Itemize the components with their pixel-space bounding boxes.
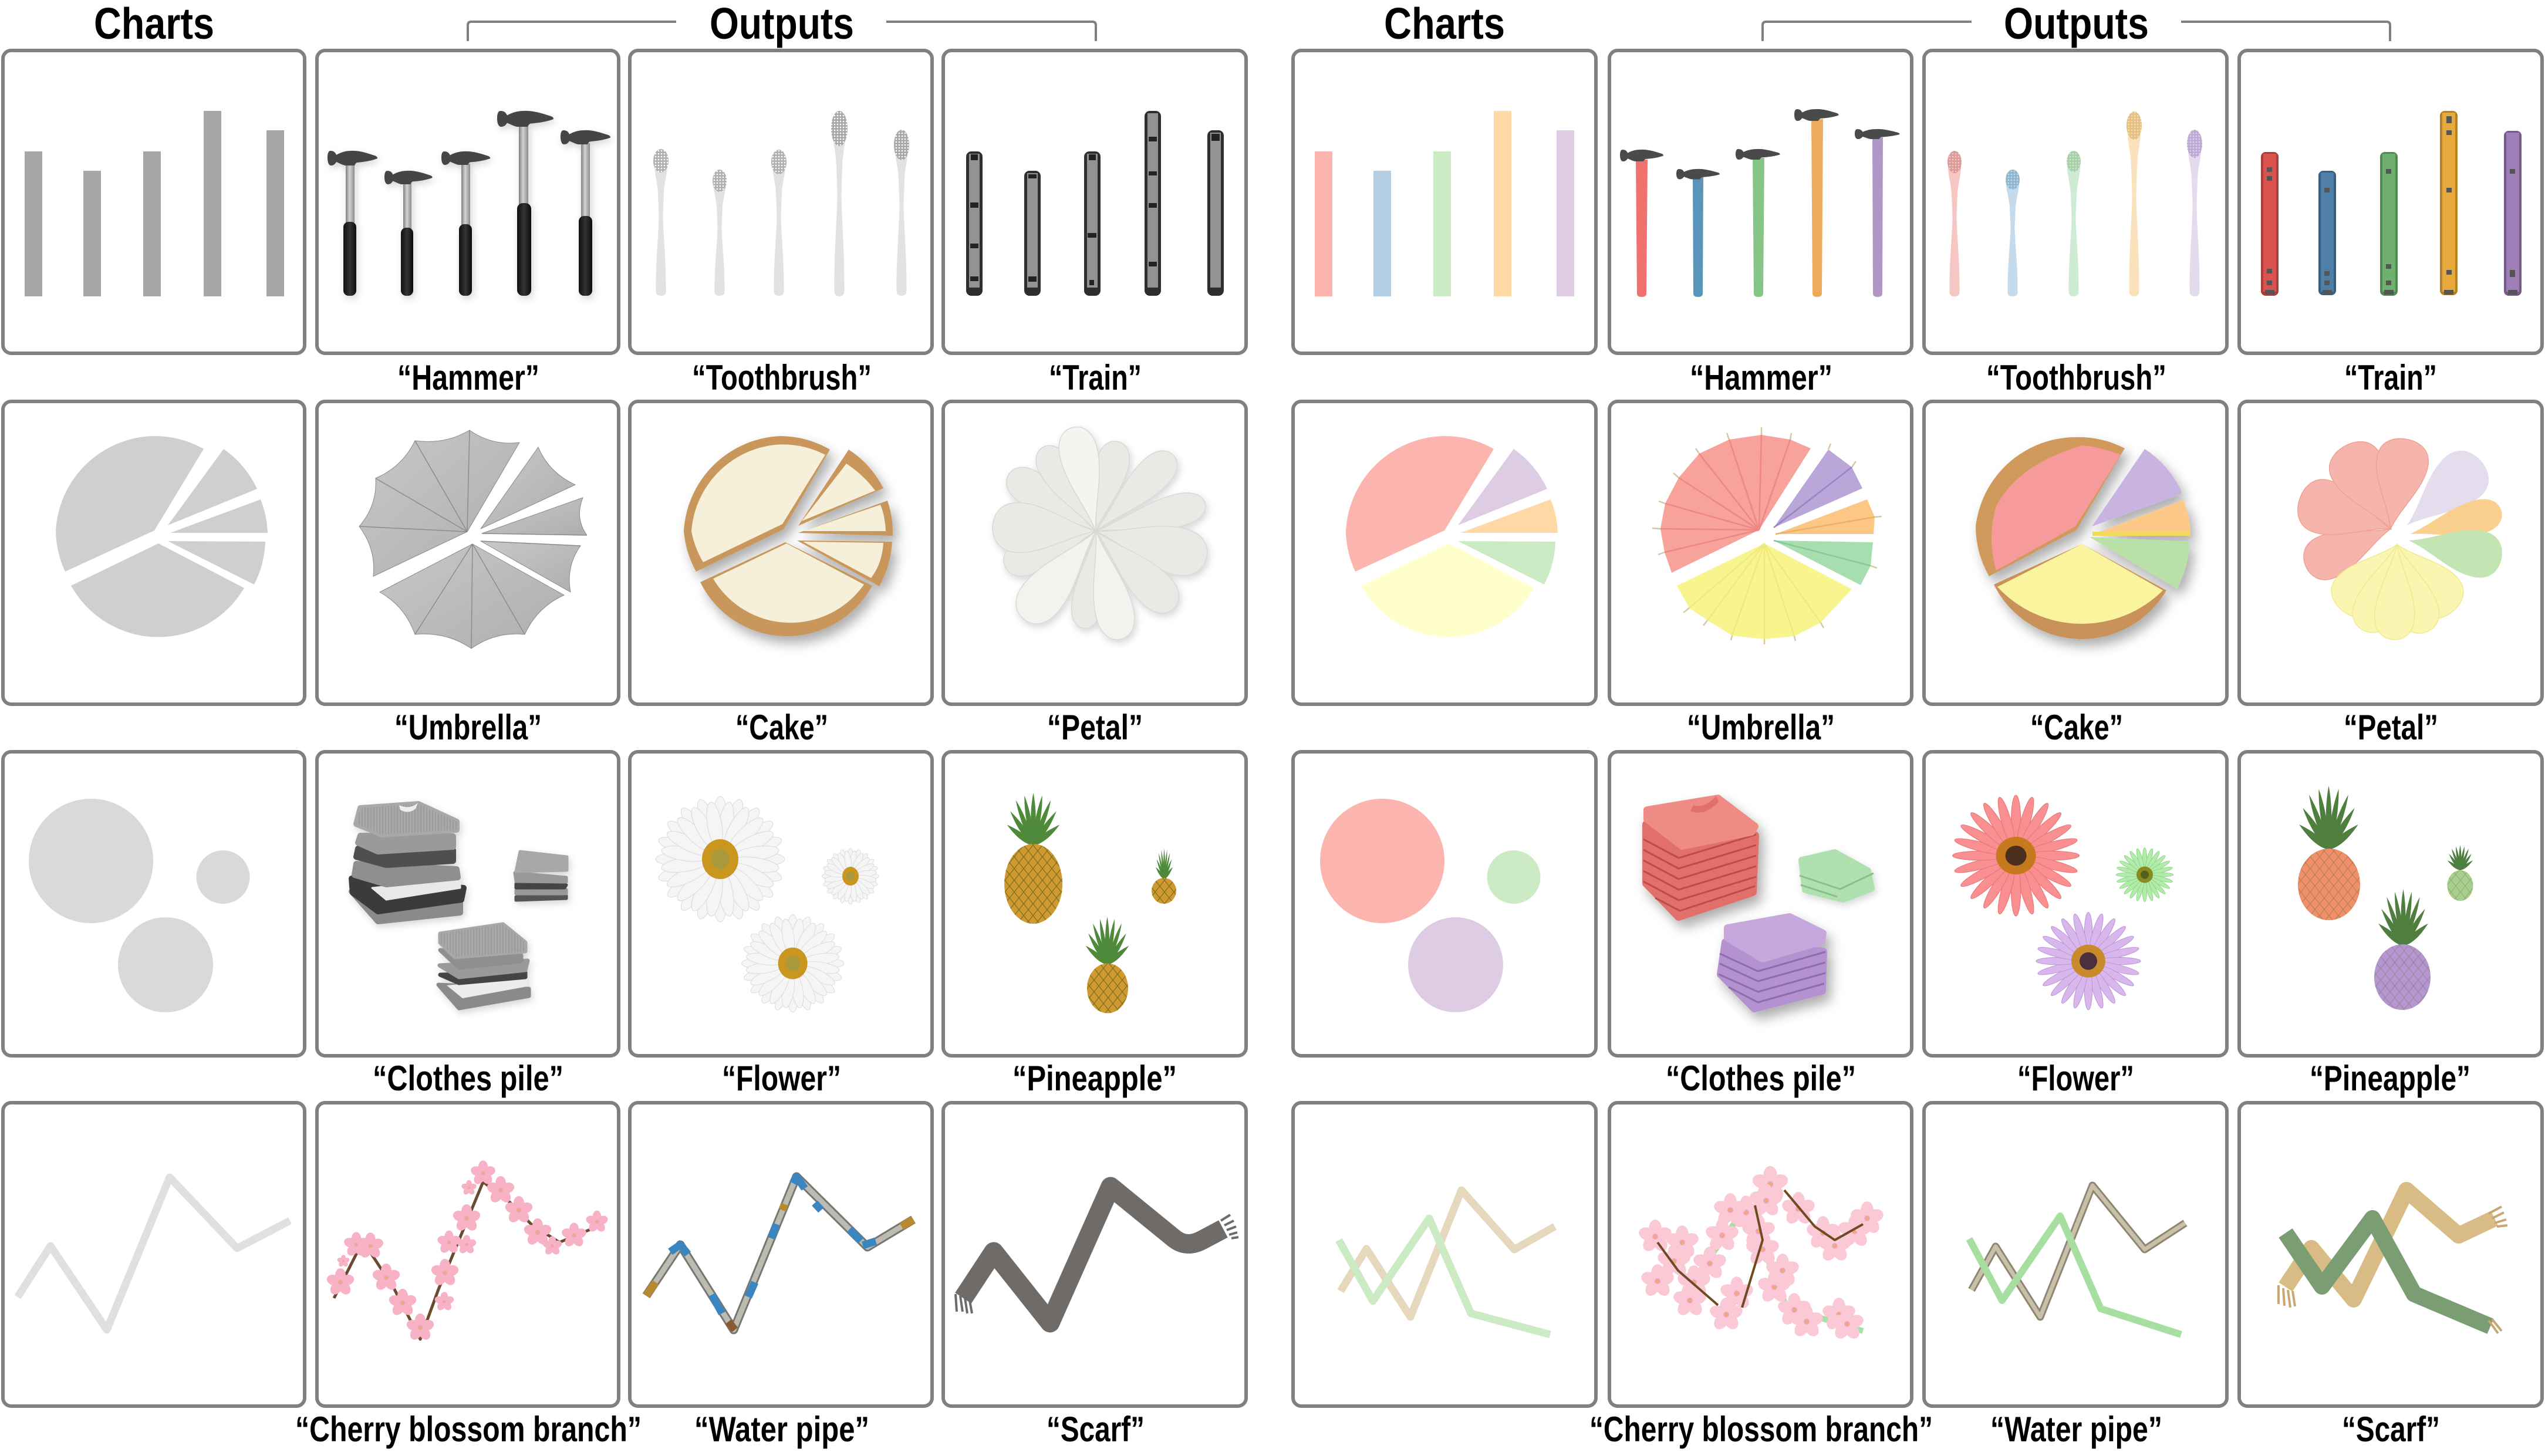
pipe	[646, 1177, 913, 1330]
label: Flower (left): “Flower”	[722, 1059, 841, 1098]
blossoms	[325, 1160, 609, 1342]
label: Petal (right): “Petal”	[2344, 708, 2438, 747]
panel: colour flowers	[1924, 752, 2227, 1056]
umbrella tips	[1652, 427, 1882, 644]
panel: grey hammers	[317, 50, 619, 353]
medium pineapple	[1084, 917, 1131, 1013]
small pile	[515, 852, 567, 900]
label: Pineapple (right): “Pineapple”	[2310, 1059, 2470, 1098]
label: Water pipe (left): “Water pipe”	[694, 1410, 869, 1449]
panel: colour petals	[2239, 401, 2542, 704]
pink flower	[1953, 795, 2080, 916]
metal pipe highlight	[1972, 1185, 2185, 1317]
hammers	[328, 111, 610, 296]
purple pineapple	[2374, 889, 2431, 1010]
large pineapple	[1004, 793, 1062, 924]
hammers	[1620, 109, 1899, 297]
label: Umbrella (right): “Umbrella”	[1687, 708, 1835, 747]
label: Hammer (right): “Hammer”	[1690, 358, 1832, 397]
umbrella segments	[359, 430, 587, 648]
lavender petal	[2389, 441, 2499, 545]
red petals	[2291, 433, 2432, 587]
trains	[966, 111, 1224, 296]
label: Train (left): “Train”	[1049, 358, 1142, 397]
label: Water pipe (right): “Water pipe”	[1990, 1410, 2162, 1449]
scarf ribbon	[963, 1187, 1223, 1323]
panel: grey clothes piles	[317, 752, 619, 1056]
panel: colour umbrella	[1609, 401, 1912, 704]
label: Toothbrush (right): “Toothbrush”	[1986, 358, 2166, 397]
label: Cake (right): “Cake”	[2030, 708, 2123, 747]
panel: colour cherry blossom	[1609, 1103, 1912, 1406]
label: Train (right): “Train”	[2344, 358, 2437, 397]
scarf fringes	[956, 1215, 1238, 1313]
panel: colour toothbrushes	[1924, 50, 2227, 353]
label: Clothes pile (right): “Clothes pile”	[1666, 1059, 1856, 1098]
panel: grey bubble chart	[3, 752, 305, 1056]
green pipe	[1969, 1216, 2181, 1335]
red pile	[1643, 796, 1756, 917]
label: Cherry blossom branch (left): “Cherry blossom branch”	[295, 1410, 642, 1449]
panel: daisies	[630, 752, 932, 1056]
small daisy	[822, 848, 879, 904]
panel: colour pineapples	[2239, 752, 2542, 1056]
medium pile	[438, 924, 529, 1008]
tan line	[1341, 1190, 1555, 1317]
purple pile	[1719, 917, 1825, 1008]
trains	[2261, 111, 2522, 296]
branch	[334, 1182, 592, 1339]
title: Outputs (left)	[468, 0, 1096, 48]
panel: colour cake	[1924, 401, 2227, 704]
large daisy	[656, 796, 785, 922]
orange pineapple	[2296, 786, 2361, 920]
green scarf	[2286, 1218, 2490, 1326]
green line	[1339, 1218, 1550, 1335]
panel: colour bubble chart	[1293, 752, 1596, 1056]
label: Petal (left): “Petal”	[1047, 708, 1143, 747]
cake slices	[1976, 437, 2190, 639]
metal pipe	[1972, 1185, 2185, 1317]
label: Clothes pile (left): “Clothes pile”	[373, 1059, 563, 1098]
title: Charts (right): Charts	[1384, 0, 1505, 48]
panel: colour pie chart	[1293, 401, 1596, 704]
panel: scarf	[943, 1103, 1246, 1406]
label: Pineapple (left): “Pineapple”	[1012, 1059, 1177, 1098]
panel: grey bar chart	[3, 50, 305, 353]
brown branches	[1658, 1190, 1863, 1308]
panel: cherry blossom branch	[317, 1103, 619, 1406]
green flower	[2116, 847, 2173, 901]
label: Hammer (left): “Hammer”	[397, 358, 539, 397]
title: Outputs (right): Outputs	[2004, 0, 2149, 48]
panel: grey line chart	[3, 1103, 305, 1406]
title: Outputs (right)	[1763, 0, 2390, 48]
label: Cherry blossom branch (right): “Cherry blossom branch”	[1589, 1410, 1933, 1449]
label: Scarf (left): “Scarf”	[1047, 1410, 1145, 1449]
panel: grey umbrella	[317, 401, 619, 704]
cake slices	[684, 436, 893, 636]
panel: grey petals	[943, 401, 1246, 704]
green petal	[2404, 518, 2506, 582]
blossoms	[1637, 1166, 1885, 1342]
umbrella ribs	[359, 430, 587, 648]
panel: grey trains	[943, 50, 1246, 353]
green pineapple	[2446, 845, 2474, 901]
toothbrushes	[653, 111, 909, 296]
pipe highlight	[646, 1177, 913, 1330]
pie slices	[56, 436, 268, 637]
medium daisy	[741, 914, 844, 1012]
orange petal	[2406, 495, 2506, 550]
label: Flower (right): “Flower”	[2017, 1059, 2134, 1098]
panel: grey pie chart	[3, 401, 305, 704]
panel: grey cake	[630, 401, 932, 704]
panel: water pipe	[630, 1103, 932, 1406]
label: Umbrella (left): “Umbrella”	[394, 708, 542, 747]
panel: colour line chart	[1293, 1103, 1596, 1406]
purple flower	[2036, 913, 2141, 1010]
umbrella segments	[1660, 435, 1875, 639]
panel: colour bar chart	[1293, 50, 1596, 353]
panel: colour hammers	[1609, 50, 1912, 353]
scarf fringes	[2279, 1207, 2507, 1333]
label: Scarf (right): “Scarf”	[2342, 1410, 2440, 1449]
tan scarf	[2286, 1190, 2495, 1299]
green stem	[1682, 1212, 1863, 1331]
green pile	[1800, 853, 1874, 899]
bars	[25, 111, 284, 296]
small pineapple	[1152, 849, 1176, 904]
large pile	[352, 803, 464, 921]
label: Cake (left): “Cake”	[735, 708, 828, 747]
panel: colour scarves	[2239, 1103, 2542, 1406]
panel: colour trains	[2239, 50, 2542, 353]
bars	[1315, 111, 1574, 296]
blue bands and fittings	[646, 1177, 913, 1330]
yellow petals	[2323, 529, 2472, 640]
title: Outputs (left): Outputs	[710, 0, 854, 48]
label: Toothbrush (left): “Toothbrush”	[692, 358, 872, 397]
bubbles	[1320, 799, 1540, 1012]
panel: colour water pipes	[1924, 1103, 2227, 1406]
title: Charts (left): Charts	[94, 0, 214, 48]
bubbles	[29, 799, 250, 1012]
panel: colour clothes piles	[1609, 752, 1912, 1056]
panel: grey toothbrushes	[630, 50, 932, 353]
toothbrushes	[1947, 112, 2202, 296]
line	[18, 1177, 290, 1330]
panel: pineapples	[943, 752, 1246, 1056]
white petals	[991, 423, 1212, 643]
pie slices	[1346, 436, 1558, 637]
